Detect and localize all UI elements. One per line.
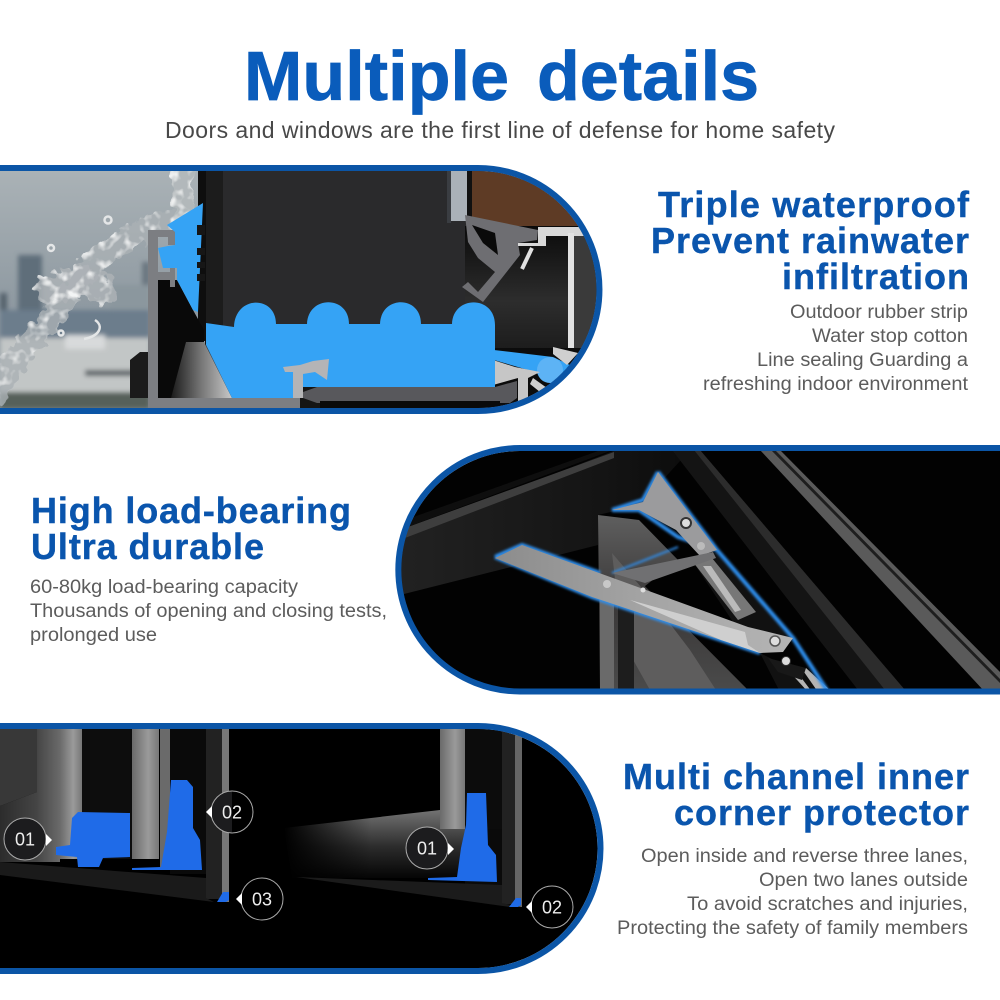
- callout 02 left: [206, 791, 253, 833]
- subtitle: Doors and windows are the first line of defense for home safety: [165, 117, 836, 143]
- text: corner protector details: Open two lanes outside: [759, 870, 968, 891]
- text: corner protector details: Protecting the safety of family members: [617, 918, 968, 939]
- blue protector left 1: [56, 812, 130, 867]
- blue protector right: [428, 793, 497, 882]
- outer aluminium frame: [130, 230, 300, 408]
- text: waterproof details: Line sealing Guarding a: [757, 350, 968, 371]
- callout 01 right: [406, 827, 454, 869]
- dark upper frame: [395, 450, 690, 595]
- panel 2 image: [395, 445, 1000, 695]
- text: waterproof details: [703, 302, 969, 395]
- hinge arm glow: [495, 472, 828, 692]
- panel 2 border: [398, 448, 1000, 692]
- heading: triple waterproof: Triple waterproof: [658, 184, 970, 225]
- text: corner protector details: To avoid scratches and injuries,: [687, 894, 968, 915]
- callout 03: 03: [252, 890, 272, 910]
- callout 01 right: 01: [417, 838, 437, 858]
- blue corner tips: [217, 892, 521, 907]
- right sill block: [447, 171, 603, 410]
- panel 1 image: [0, 165, 610, 415]
- diagonal frame rails: [672, 450, 1000, 692]
- heading: multi channel: Multi channel inner: [623, 756, 969, 797]
- title: details: [537, 37, 759, 115]
- panel 3 border: [0, 726, 600, 971]
- text: corner protector details: [617, 846, 968, 939]
- heading: high load-bearing: Ultra durable: [31, 526, 264, 567]
- panel: inner corner protector: [0, 724, 605, 974]
- sliding track: [696, 552, 789, 637]
- panel 3 image: [0, 724, 605, 974]
- panel: waterproof cross-section: [0, 165, 610, 415]
- heading: high load-bearing: [31, 490, 351, 567]
- title: [244, 37, 759, 115]
- heading: multi channel: [623, 756, 969, 833]
- left window frame: [0, 729, 229, 902]
- heading: triple waterproof: infiltration: [782, 256, 969, 297]
- sash comb: [197, 225, 202, 281]
- text: waterproof details: refreshing indoor environment: [703, 374, 969, 395]
- callout 01 left: [4, 818, 52, 860]
- right window frame: [284, 729, 522, 907]
- black window sash: [205, 171, 467, 331]
- callout 02 left: 02: [222, 802, 242, 822]
- lower thermal break bar: [283, 359, 517, 409]
- text: corner protector details: Open inside and reverse three lanes,: [641, 846, 968, 867]
- panel 1 border: [0, 168, 599, 411]
- blue water-stop cotton: [206, 302, 495, 398]
- vertical post: [598, 515, 748, 690]
- callout 03: [236, 878, 283, 920]
- blue water-stop gasket: [158, 203, 203, 312]
- sky and blurred city: [0, 165, 205, 415]
- title: Multiple: [244, 37, 509, 115]
- heading: triple waterproof: [651, 184, 970, 297]
- heading: high load-bearing: High load-bearing: [31, 490, 351, 531]
- callout 01 left: 01: [15, 830, 35, 850]
- heading: triple waterproof: Prevent rainwater: [651, 220, 969, 261]
- callout 02 right: [526, 886, 573, 928]
- text: waterproof details: Water stop cotton: [812, 326, 968, 347]
- hinge arm parts: [495, 472, 793, 666]
- callout 02 right: 02: [542, 898, 562, 918]
- splash droplets: [48, 216, 112, 339]
- text: load-bearing details: [30, 577, 387, 646]
- text: load-bearing details: 60-80kg load-bearing capacity: [30, 577, 299, 598]
- water splash: [0, 168, 184, 400]
- panel: window hinge: [395, 445, 1000, 695]
- heading: multi channel: corner protector: [674, 792, 969, 833]
- text: load-bearing details: prolonged use: [30, 625, 157, 646]
- text: load-bearing details: Thousands of opening and closing tests,: [30, 601, 387, 622]
- blue protector left 2: [132, 780, 202, 870]
- text: waterproof details: Outdoor rubber strip: [790, 302, 968, 323]
